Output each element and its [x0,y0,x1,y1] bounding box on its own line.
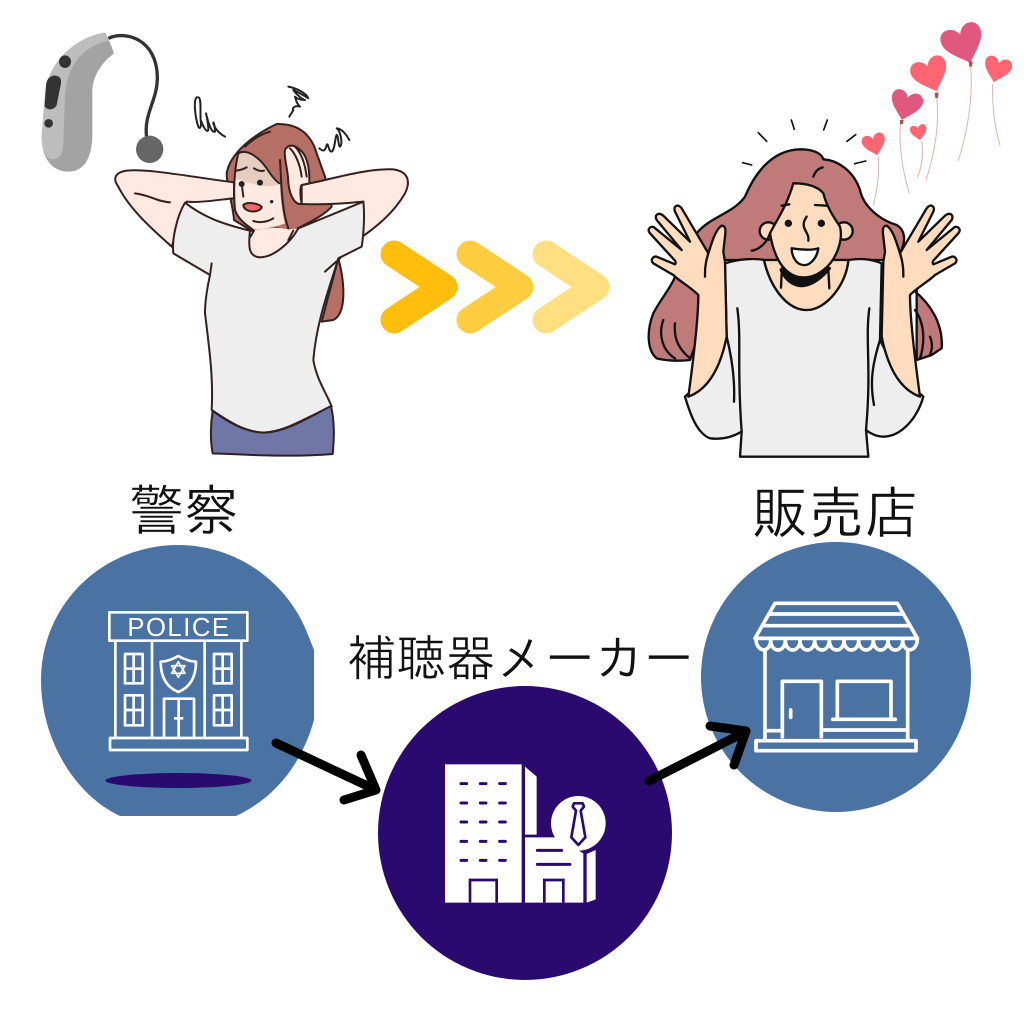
heading: hearing aid maker: 補聴器メーカー [347,632,694,687]
balloon strings [873,66,1000,206]
arrow: three yellow chevrons [394,254,596,320]
illustration: happy woman with raised hands [649,120,960,457]
arrow: police to maker [276,743,376,800]
hair [649,149,942,361]
icon: office building with tie [445,764,606,903]
arms [115,170,234,247]
t-shirt [173,202,364,433]
hearts [860,20,1014,158]
sweater [685,259,923,457]
trousers [211,406,334,456]
right arm and hand [882,206,960,397]
ears [760,222,777,240]
heading: police: 警察 [129,480,239,542]
sign text: POLICE [127,614,229,642]
illustration: stressed woman covering ears [115,87,408,456]
panel: hearing aid maker circle [378,686,672,980]
panel: police circle [41,545,314,816]
face [770,183,841,277]
face [234,152,285,229]
icon: police station [109,612,247,750]
surprise rays [743,120,866,165]
back hair [322,258,343,322]
hand on ear [285,146,309,204]
shadow ellipse [106,773,252,788]
panel: store circle [701,542,971,812]
heading: store: 販売店 [752,482,920,545]
illustration: heart balloons [860,20,1014,206]
icon: storefront [755,603,917,751]
left arm and hand [649,206,727,397]
neck [249,228,298,257]
icon: hearing aid [42,33,163,172]
stress scribbles [195,87,349,152]
arrow: maker to store [649,726,746,781]
neck [764,260,848,310]
